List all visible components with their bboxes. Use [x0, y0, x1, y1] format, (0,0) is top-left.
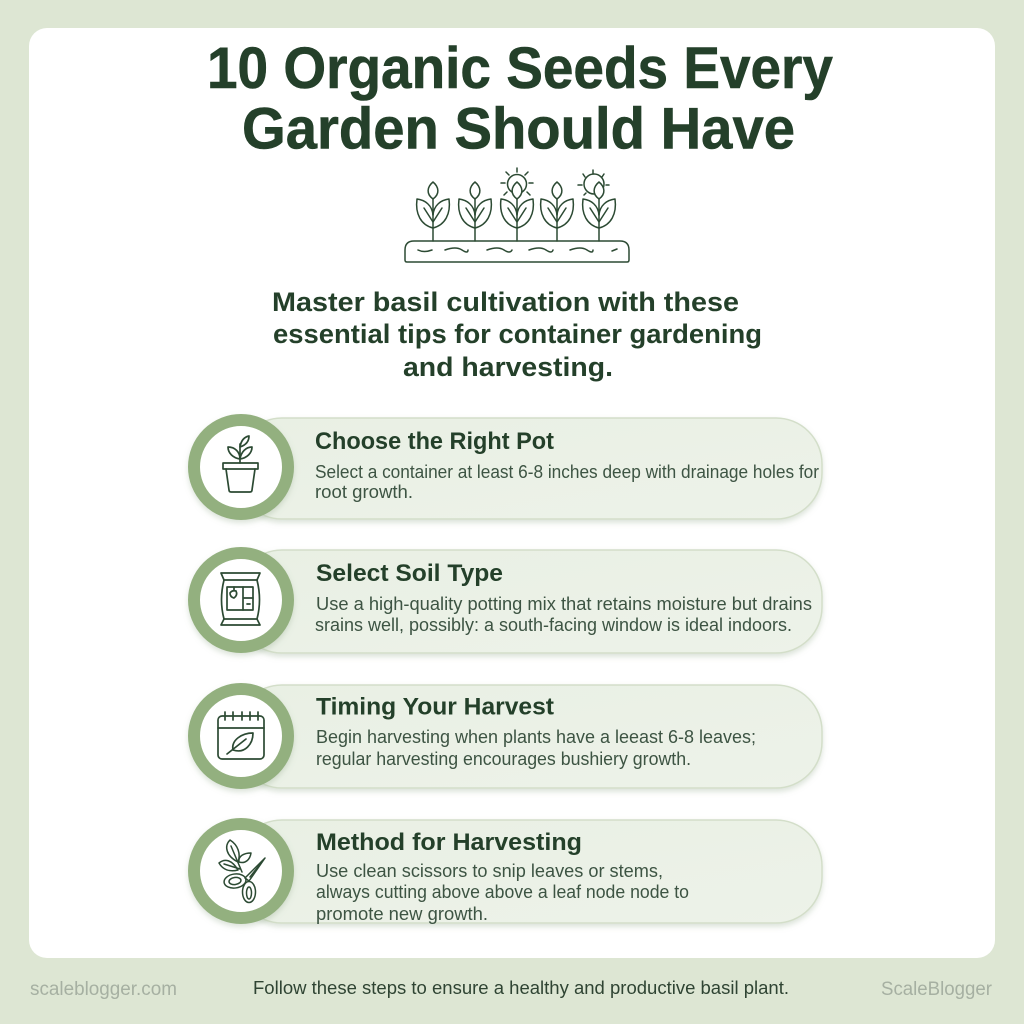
description: Begin harvesting when plants have a leeast 6-8 leaves; [316, 727, 756, 747]
icon ring [194, 420, 288, 514]
heading: Select Soil Type [316, 560, 503, 587]
panel: method for harvesting: promote new growth. [316, 904, 488, 924]
icon: leaves and scissors [219, 840, 265, 902]
panel: choose the right pot [194, 418, 822, 519]
panel: method for harvesting: always cutting above above a leaf node node to [316, 882, 689, 902]
card background [236, 418, 822, 519]
subtitle: essential tips for container gardening [273, 319, 762, 349]
footer left brand: scaleblogger.com [30, 979, 177, 1000]
heading: Choose the Right Pot [315, 428, 554, 455]
panel: timing your harvest [194, 685, 822, 788]
title: 10 Organic Seeds Every [207, 36, 833, 101]
panel: select soil type [194, 550, 822, 653]
heading: Method for Harvesting [316, 829, 582, 856]
description: Select a container at least 6-8 inches deep with drainage holes for [315, 462, 819, 482]
icon: calendar with leaf [218, 712, 264, 759]
title: Garden Should Have [242, 96, 795, 162]
card background [236, 550, 822, 653]
icon ring [194, 689, 288, 783]
icon ring [194, 824, 288, 918]
description: Use clean scissors to snip leaves or stems, [316, 861, 663, 881]
heading: Timing Your Harvest [316, 694, 554, 720]
icon ring [194, 553, 288, 647]
subtitle: and harvesting. [403, 352, 613, 382]
panel: select soil type: srains well, possibly: a south-facing window is ideal indoors. [315, 615, 792, 635]
card background [236, 820, 822, 923]
footer message: Follow these steps to ensure a healthy and productive basil plant. [253, 978, 789, 998]
panel: method for harvesting [194, 820, 822, 924]
icon: potted seedling [223, 436, 258, 492]
icon: soil bag [221, 573, 260, 625]
footer right brand: ScaleBlogger [881, 979, 993, 1000]
subtitle [272, 287, 762, 382]
panel: choose the right pot: root growth. [315, 482, 413, 502]
card background [236, 685, 822, 788]
description: Use a high-quality potting mix that retains moisture but drains [316, 594, 812, 614]
subtitle: Master basil cultivation with these [272, 287, 739, 317]
icon: seedlings row in soil bed [405, 168, 629, 262]
panel: timing your harvest: regular harvesting encourages bushiery growth. [316, 749, 691, 769]
title [207, 36, 833, 162]
